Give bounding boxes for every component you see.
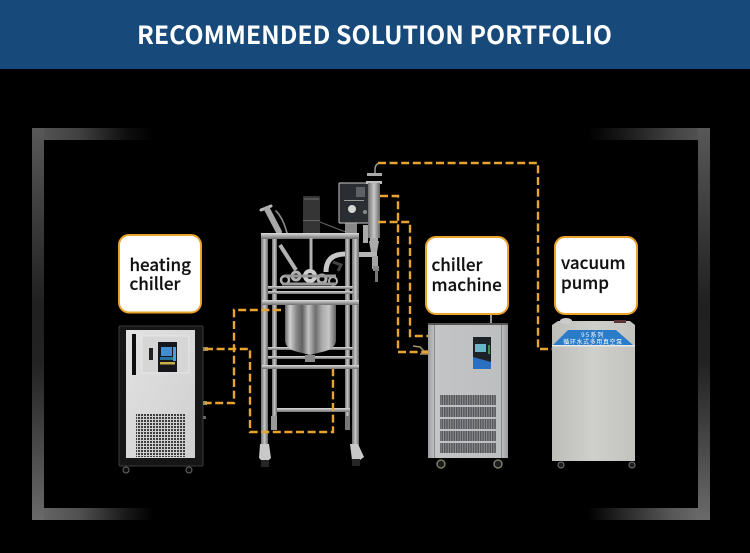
callout: vacuum pump: vacuum: [561, 249, 626, 274]
callout: heating chiller: [119, 235, 201, 312]
vents: [440, 395, 496, 453]
lid fittings: [280, 238, 345, 285]
front panel: [126, 330, 195, 458]
casters: [437, 460, 445, 468]
control panel: [473, 337, 491, 369]
glass reactor: [259, 163, 382, 467]
dashed connection: condenser to chiller upper port: [378, 222, 428, 336]
vacuum pump unit: [552, 318, 635, 468]
callout: heating chiller: heating: [130, 251, 191, 276]
grille: [136, 414, 186, 457]
casters: [123, 467, 129, 473]
dashed connection: reactor jacket to heating chiller lower port: [205, 310, 281, 403]
dashed connection: condenser to chiller lower port: [380, 196, 428, 352]
heating chiller unit: [119, 326, 208, 473]
stirring motor: [303, 196, 346, 234]
callout: heating chiller: chiller: [130, 270, 180, 295]
feed funnel arm: [261, 206, 287, 233]
control box: [339, 183, 369, 223]
casters: [558, 462, 564, 468]
callout: chiller machine: chiller: [432, 251, 482, 276]
frame posts: [261, 233, 268, 445]
inlet valve: [413, 346, 428, 354]
callout: vacuum pump: pump: [561, 269, 609, 294]
blue label: 循环水式多用真空泵: [563, 337, 623, 346]
chiller machine unit: [413, 313, 508, 468]
control panel: [142, 336, 189, 373]
gradient frame: [32, 128, 710, 520]
header banner: [0, 0, 750, 69]
title: RECOMMENDED SOLUTION PORTFOLIO: [137, 16, 612, 52]
vessel: [285, 305, 336, 355]
ports: [203, 347, 208, 351]
callout: vacuum pump: [555, 237, 637, 314]
callout: chiller machine: [426, 237, 508, 314]
blue label: 95系列: [581, 330, 605, 339]
condenser: [345, 173, 382, 282]
callout: chiller machine: machine: [432, 271, 502, 296]
blue label: [552, 330, 635, 346]
dashed connection: reactor jacket to heating chiller upper port: [205, 349, 333, 432]
frame cross bars: [261, 233, 359, 239]
dashed connection: condenser to vacuum pump: [378, 163, 552, 349]
casters: [259, 416, 364, 467]
condenser hose: [375, 163, 381, 173]
